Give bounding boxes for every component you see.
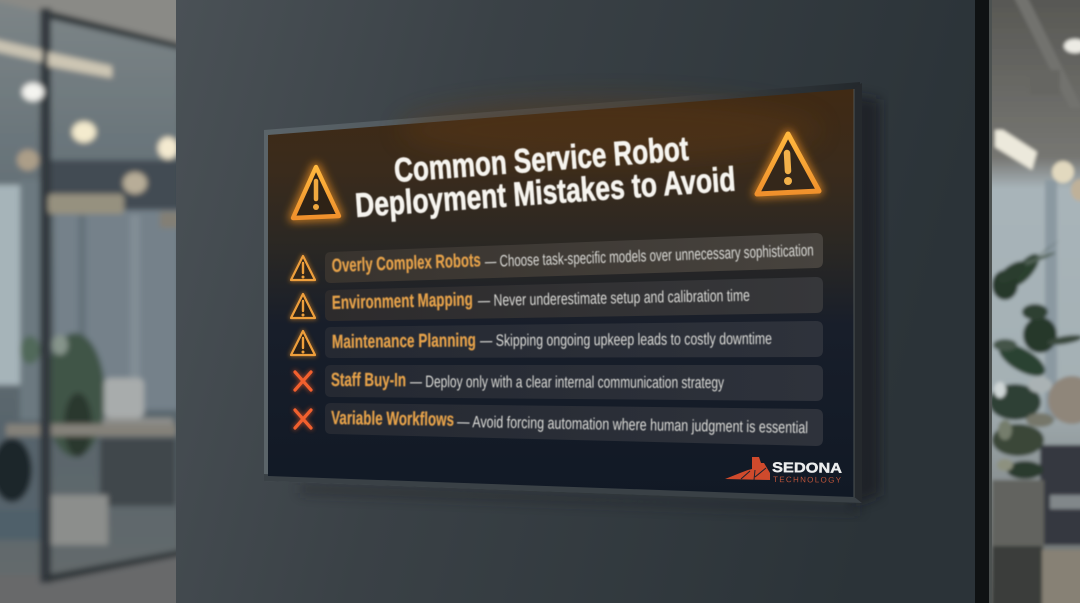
row 2 text — [332, 287, 750, 314]
row 1: Overly Complex Robots — [291, 233, 823, 283]
row 1 text — [331, 242, 814, 277]
row 5 panel — [325, 403, 823, 446]
row 3 text: — Skipping ongoing upkeep leads to costly downtime — [480, 330, 772, 350]
row 3 panel — [325, 321, 823, 358]
logo subtitle: TECHNOLOGY — [773, 475, 842, 485]
row 3 text: Maintenance Planning — [332, 330, 476, 353]
row 4 text: — Deploy only with a clear internal communication strategy — [410, 373, 725, 392]
monitor — [264, 82, 880, 513]
logo mountain mark — [725, 457, 770, 480]
glass frame — [40, 9, 190, 52]
row 1 text: — Choose task-specific models over unnecessary sophistication — [485, 242, 814, 271]
row 1 text: Overly Complex Robots — [331, 250, 481, 277]
background: blurred office left — [0, 0, 190, 603]
row 4 text: Staff Buy-In — [331, 370, 406, 391]
row 2 text: — Never underestimate setup and calibration time — [478, 287, 750, 310]
row 1 panel — [325, 233, 823, 283]
icon: warning row 3 — [291, 331, 315, 355]
row 3 text — [332, 330, 772, 353]
row 5 text — [331, 408, 808, 437]
row 4: Staff Buy-In — [295, 365, 823, 401]
title: Deployment Mistakes to Avoid — [354, 160, 737, 225]
row 2 text: Environment Mapping — [332, 289, 473, 314]
row 4 panel — [325, 365, 823, 401]
logo: Sedona Technology — [725, 457, 842, 485]
logo wordmark: SEDONA — [772, 459, 842, 476]
title: Common Service Robot — [393, 130, 690, 190]
row 2: Environment Mapping — [291, 277, 823, 321]
background: blurred office right with plant — [985, 0, 1080, 603]
wall panel — [176, 0, 992, 603]
icon: large warning triangle right — [757, 134, 819, 194]
row 5 text: — Avoid forcing automation where human judgment is essential — [457, 413, 808, 437]
icon: warning row 1 — [291, 256, 315, 280]
icon: large warning triangle left — [293, 167, 339, 218]
icon: cross row 5 — [295, 410, 311, 428]
icon: cross row 4 — [295, 372, 311, 390]
ceiling lights — [0, 38, 42, 62]
icon: warning row 2 — [291, 294, 315, 318]
row 5 text: Variable Workflows — [331, 408, 454, 431]
screen — [268, 89, 854, 497]
row 3: Maintenance Planning — [291, 321, 823, 358]
row 5: Variable Workflows — [295, 403, 823, 446]
monitor bezel — [264, 82, 862, 503]
row 2 panel — [325, 277, 823, 321]
monitor shadow — [852, 95, 880, 505]
title — [354, 130, 737, 225]
row 4 text — [331, 370, 725, 392]
